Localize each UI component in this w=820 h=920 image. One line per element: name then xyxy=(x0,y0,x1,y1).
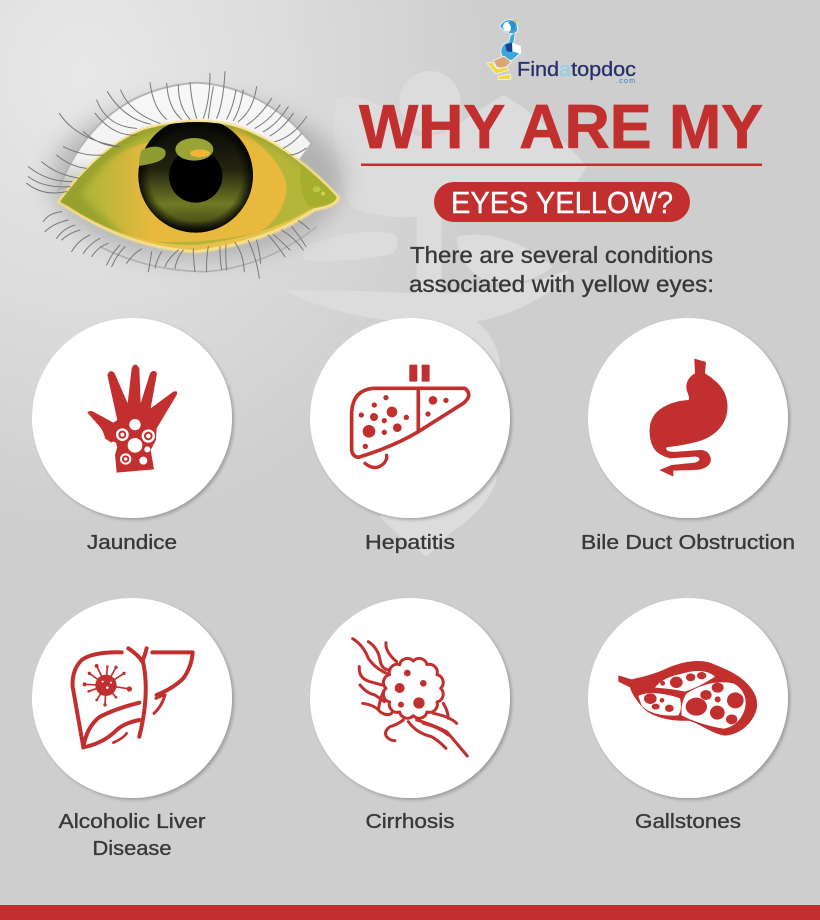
eye illustration xyxy=(27,72,343,278)
title: why are my: WHY ARE MY xyxy=(359,93,763,162)
eye shadow xyxy=(50,100,343,260)
icon: liver with virus xyxy=(73,648,193,747)
label: cirrhosis: Cirrhosis xyxy=(366,811,454,833)
sclera xyxy=(60,122,337,250)
label: alcoholic liver disease: Disease xyxy=(92,838,172,860)
label: hepatitis: Hepatitis xyxy=(365,532,455,554)
label: bile duct obstruction: Bile Duct Obstruction xyxy=(581,532,795,554)
sclera rim xyxy=(57,120,340,253)
logo wordmark: Findatopdoc xyxy=(517,59,636,81)
iris xyxy=(138,118,253,233)
logo xyxy=(487,19,636,85)
footer band xyxy=(0,905,820,920)
condition: hepatitis xyxy=(310,318,510,518)
icon: stomach xyxy=(650,359,727,477)
iris highlights xyxy=(175,138,213,161)
icon: cirrhotic cell xyxy=(353,639,467,756)
circle xyxy=(310,318,510,518)
intro text: associated with yellow eyes: xyxy=(409,271,714,297)
intro text: There are several conditions xyxy=(410,242,713,268)
upper eyelid xyxy=(58,83,312,190)
condition: bile duct obstruction xyxy=(588,318,788,518)
caduceus watermark xyxy=(283,71,587,557)
circle xyxy=(588,318,788,518)
title pill: eyes yellow: EYES YELLOW? xyxy=(451,185,673,220)
icon: hand xyxy=(87,364,177,473)
condition: gallstones xyxy=(588,598,788,798)
lower eyelid crease xyxy=(100,227,317,272)
title rule xyxy=(361,164,762,166)
label: jaundice: Jaundice xyxy=(87,532,177,554)
intro text xyxy=(409,242,714,297)
condition: cirrhosis xyxy=(310,598,510,798)
logo domain: .com xyxy=(616,78,635,85)
label: alcoholic liver disease: Alcoholic Liver xyxy=(58,811,206,833)
logo mascot xyxy=(487,19,521,79)
eye details xyxy=(60,122,336,250)
eyelashes xyxy=(27,72,309,278)
label: alcoholic liver disease xyxy=(58,811,206,860)
icon: liver with spots xyxy=(352,365,469,467)
pupil xyxy=(169,149,222,203)
condition: jaundice xyxy=(32,318,232,518)
condition: alcoholic liver disease xyxy=(32,598,232,798)
circle xyxy=(32,318,232,518)
circle xyxy=(588,598,788,798)
circle xyxy=(310,598,510,798)
circle xyxy=(32,598,232,798)
label: gallstones: Gallstones xyxy=(635,811,741,833)
icon: gallbladder with stones xyxy=(618,661,757,736)
